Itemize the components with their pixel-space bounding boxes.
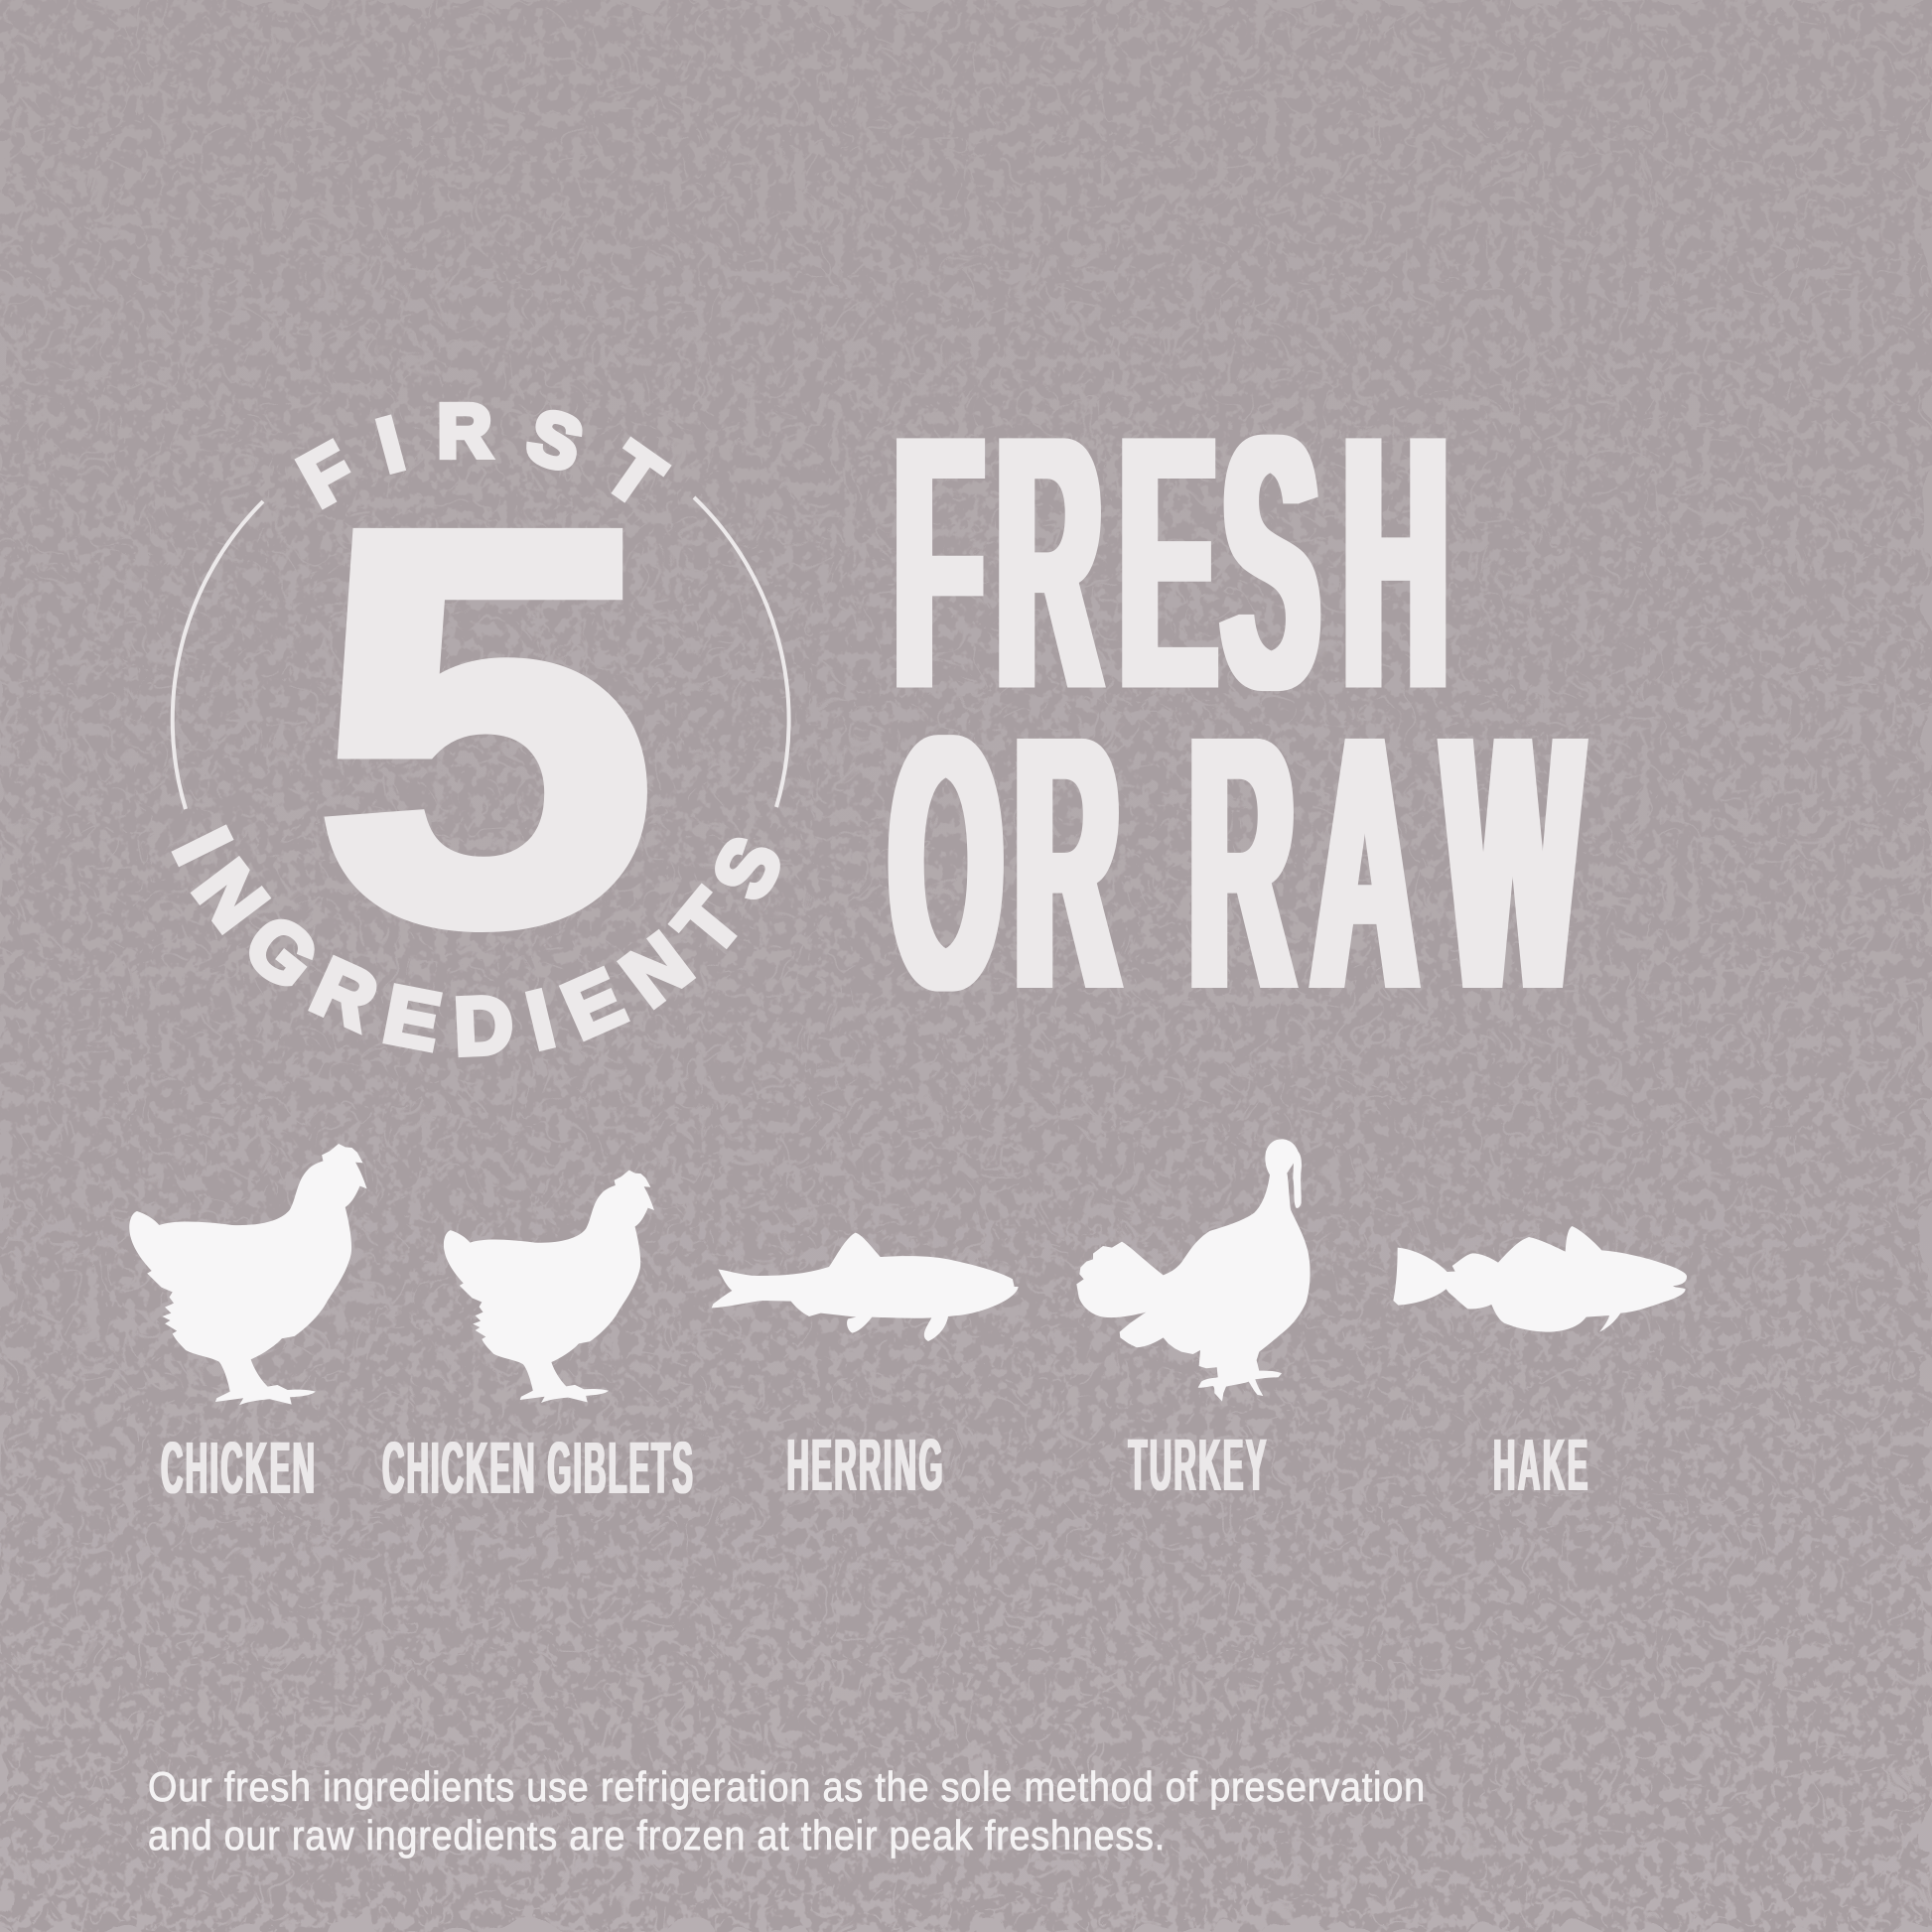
label: hake: HAKE bbox=[1493, 1426, 1587, 1507]
label: herring: HERRING bbox=[786, 1426, 943, 1507]
icon: hake bbox=[1393, 1226, 1687, 1332]
headline: fresh or raw bbox=[890, 359, 1583, 1064]
footnote text bbox=[148, 1764, 1425, 1859]
label: chicken giblets: CHICKEN GIBLETS bbox=[382, 1429, 693, 1510]
icon: chicken bbox=[129, 1144, 367, 1405]
label: chicken: CHICKEN bbox=[161, 1429, 315, 1510]
footnote text: Our fresh ingredients use refrigeration as the sole method of preservation bbox=[148, 1764, 1425, 1810]
label: turkey: TURKEY bbox=[1128, 1426, 1267, 1507]
headline: fresh or raw: FRESH bbox=[895, 359, 1449, 764]
badge numeral: 5: 5 bbox=[315, 415, 656, 1038]
icon: herring bbox=[712, 1233, 1019, 1341]
badge ring arcs bbox=[173, 497, 789, 809]
ingredient labels bbox=[161, 1426, 1587, 1510]
badge text: INGREDIENTS: INGREDIENTS bbox=[171, 824, 780, 1058]
badge text: FIRST: FIRST bbox=[294, 401, 672, 510]
footnote text: and our raw ingredients are frozen at their peak freshness. bbox=[148, 1813, 1165, 1859]
icon: chicken giblets hen bbox=[444, 1171, 654, 1403]
badge: first 5 ingredients bbox=[171, 401, 791, 1058]
icon: turkey bbox=[1076, 1139, 1311, 1402]
headline: fresh or raw: OR RAW bbox=[890, 659, 1583, 1064]
